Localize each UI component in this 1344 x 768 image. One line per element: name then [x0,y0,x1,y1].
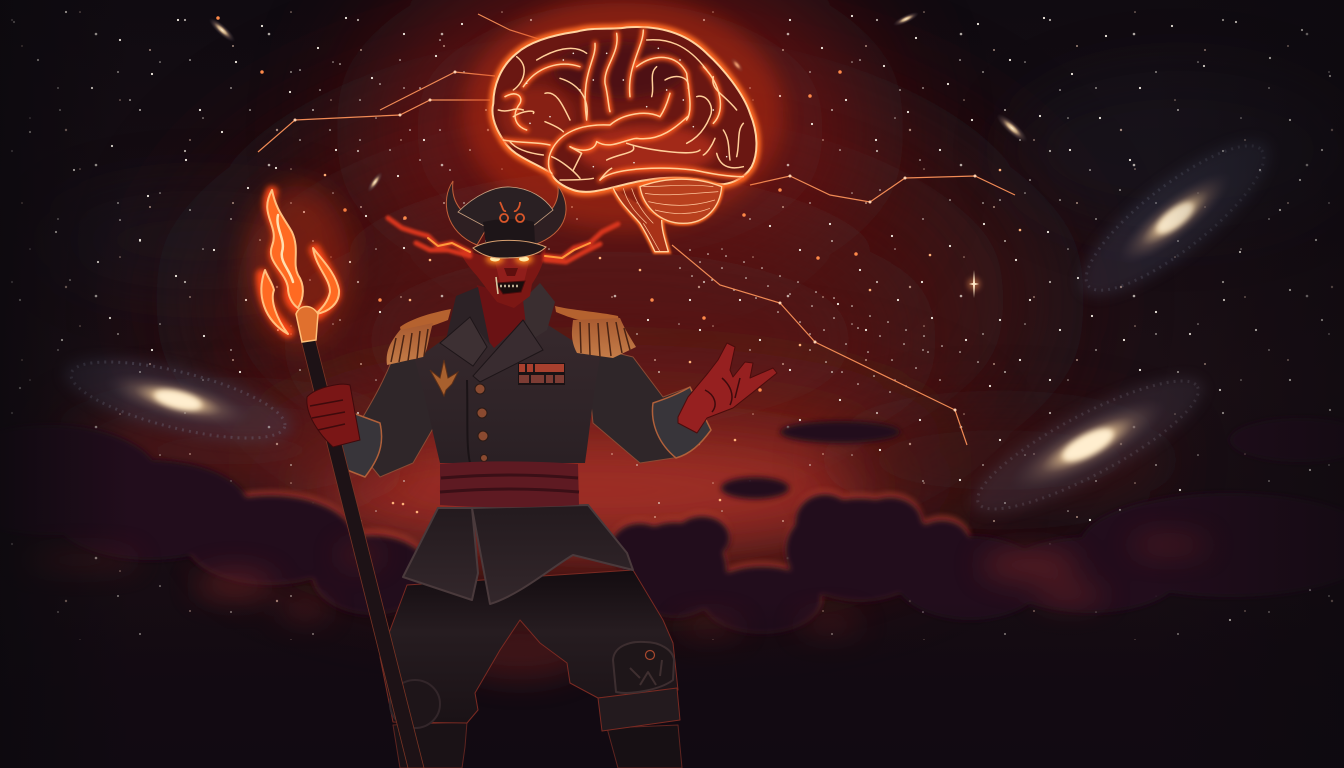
epaulette: viewer left [387,309,451,365]
badge: winged insignia [430,360,458,396]
galaxy: left spiral [56,340,300,460]
galaxy: lower right spiral [957,354,1219,536]
galaxy: upper right spiral [1060,117,1290,319]
horns [446,181,566,245]
legs and boots [380,570,682,768]
hand: open palm [678,343,777,433]
star: bright sparkle [968,270,980,298]
eye flames [388,218,618,262]
medal ribbons [518,363,565,385]
torso jacket [415,320,600,463]
head: demon face [459,247,546,308]
figure: demon officer [296,181,777,768]
constellation lines [258,14,1015,445]
hand: gripping staff [307,384,360,447]
small distant galaxies [206,9,1031,194]
trident flame [246,185,350,345]
officer cap [458,187,553,258]
collar and lapels [440,283,555,382]
coat buttons [475,384,488,462]
staff [296,306,424,768]
coat skirt [403,505,633,604]
glowing eyes [486,254,533,264]
brain: glowing outline with folds [463,0,783,252]
epaulette: viewer right [555,306,636,358]
sash [440,461,579,507]
neck [472,285,527,348]
sleeve: viewer left arm [332,358,435,477]
sleeve: viewer right arm [585,345,711,463]
